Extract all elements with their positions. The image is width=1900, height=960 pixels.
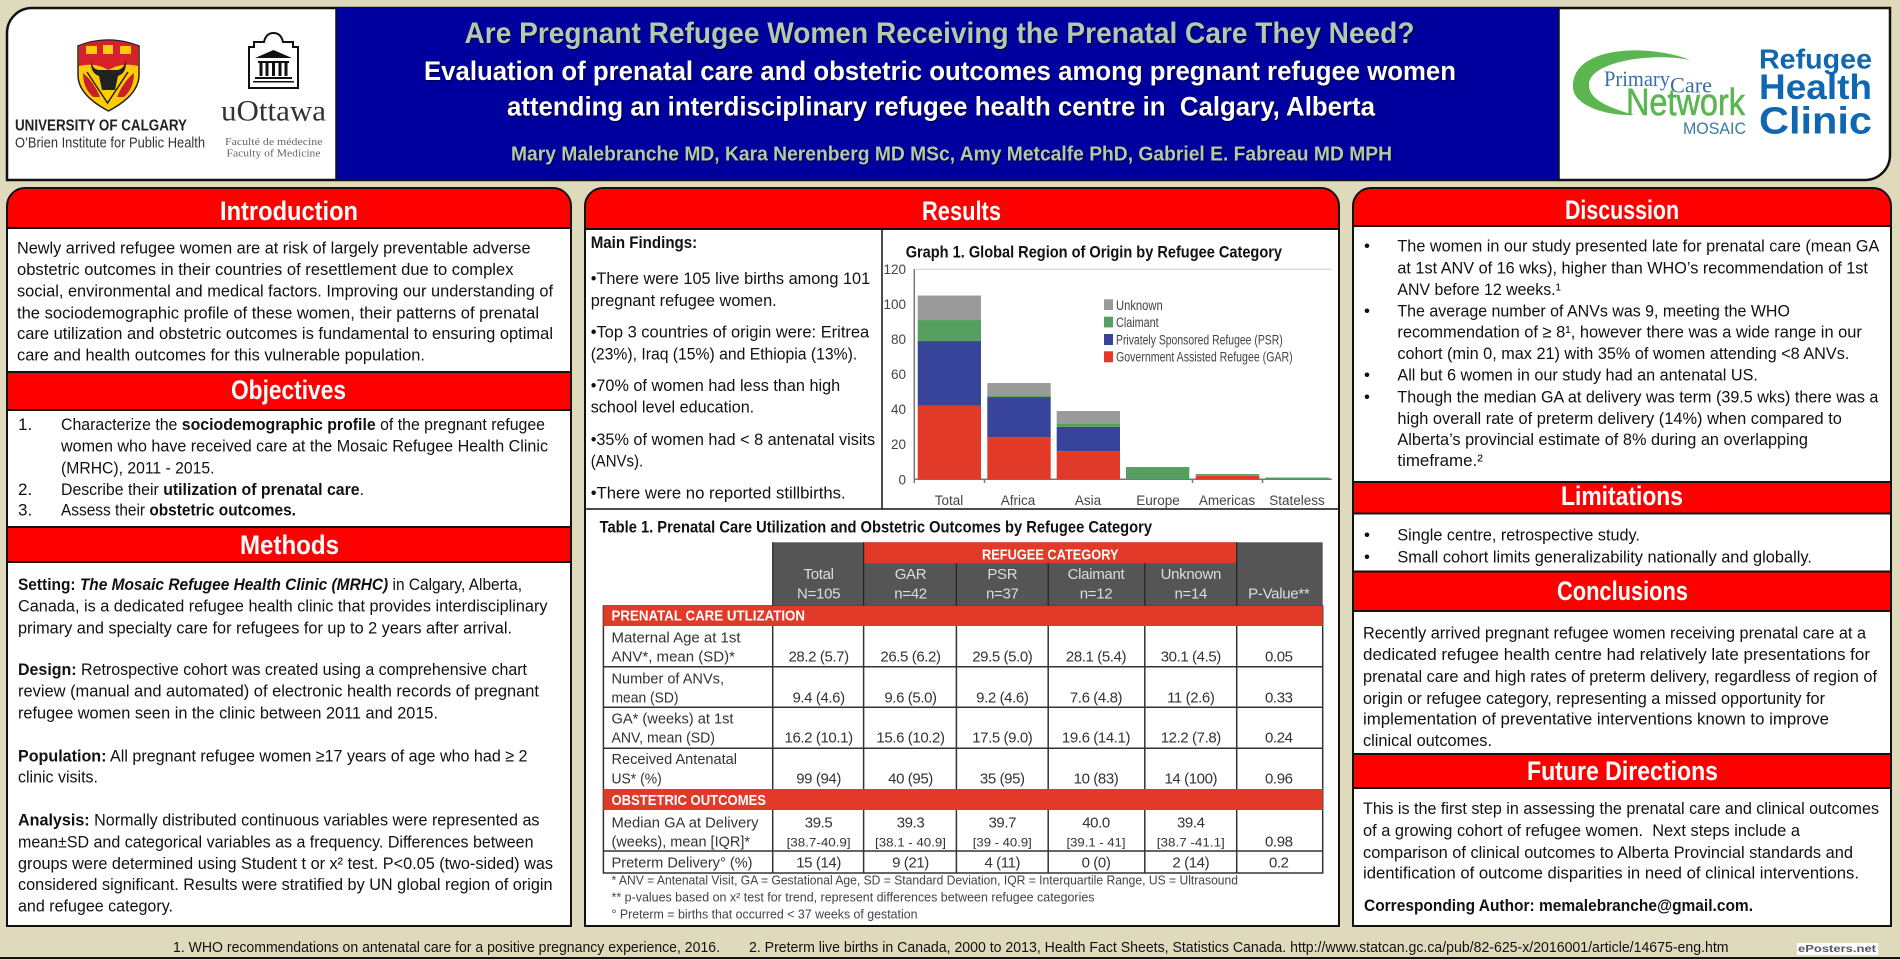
- text block: main findings: •Top 3 countries of origin were: Eritrea: [591, 323, 870, 342]
- table header: n=12: [1080, 585, 1112, 602]
- row: received antenatal US: US* (%): [612, 770, 662, 787]
- row: GA at first ANV: 17.5 (9.0): [972, 730, 1033, 747]
- row: GA at first ANV: 0.24: [1265, 730, 1293, 747]
- row: received antenatal US: 0.96: [1265, 770, 1293, 787]
- row: received antenatal US: 14 (100): [1164, 770, 1218, 787]
- header banner: [7, 8, 1890, 180]
- text block: main findings: (23%), Iraq (15%) and Ethiopia (13%).: [591, 344, 857, 363]
- text block: main findings: •There were 105 live births among 101: [591, 269, 870, 288]
- y axis labels: 60: [891, 367, 906, 382]
- panel: Future Directions: of a growing cohort of refugee women. Next steps include a: [1363, 821, 1801, 840]
- legend: [1104, 298, 1293, 365]
- logo: Primary Care Network Mosaic and Refugee Health Clinic: Health: [1759, 68, 1872, 107]
- panel: Future Directions: [1353, 754, 1891, 926]
- panel: Methods: primary and specialty care for refugees for up to 2 years after arrival.: [18, 618, 512, 637]
- section band: obstetric outcomes: OBSTETRIC OUTCOMES: [612, 792, 766, 809]
- panel: Methods: review (manual and automated) of electronic health records of pregnant: [18, 682, 539, 701]
- row: preterm delivery: 4 (11): [984, 854, 1021, 871]
- table header: n=37: [986, 585, 1019, 602]
- x axis labels: Africa: [1001, 493, 1036, 508]
- table: prenatal care utilization and obstetric outcomes: [600, 519, 1323, 921]
- panel: Discussion: cohort (min 0, max 21) with 35% of women attending <8 ANVs.: [1397, 344, 1849, 363]
- row: number of ANVs: 9.4 (4.6): [792, 690, 845, 707]
- row: preterm delivery: 2 (14): [1172, 854, 1210, 871]
- logo: University of Calgary: [15, 40, 205, 151]
- title block: Are Pregnant Refugee Women Receiving the Prenatal Care They Need?: [464, 17, 1414, 50]
- x axis labels: [935, 493, 1325, 508]
- row: received antenatal US: 35 (95): [980, 770, 1025, 787]
- row: GA at first ANV: 16.2 (10.1): [785, 730, 853, 747]
- row: maternal age: Maternal Age at 1st: [612, 629, 741, 646]
- text block: main findings: (ANVs).: [591, 452, 643, 471]
- table grid: [603, 606, 1323, 873]
- logo: Primary Care Network Mosaic and Refugee Health Clinic: Clinic: [1759, 100, 1872, 142]
- text block: main findings: •70% of women had less than high: [591, 376, 840, 395]
- panel: Methods: considered significant. Results were stratified by UN global region of origin: [18, 875, 552, 894]
- panel: Conclusions: Conclusions: [1557, 576, 1688, 606]
- row: median GA at delivery: [612, 814, 1293, 851]
- panel: Discussion: •: [1364, 366, 1370, 385]
- x axis labels: Europe: [1136, 493, 1180, 508]
- panel: Limitations: Limitations: [1561, 481, 1683, 511]
- panel: Objectives: 3.: [18, 501, 32, 520]
- logo: University of Calgary: UNIVERSITY OF CALGARY: [15, 118, 188, 135]
- logo: uOttawa: Faculté de médecine: [225, 136, 323, 148]
- row: preterm delivery: 0.2: [1269, 854, 1289, 871]
- row: GA at first ANV: 12.2 (7.8): [1161, 730, 1221, 747]
- table header: n=42: [894, 585, 927, 602]
- legend: Government Assisted Refugee (GAR): [1116, 350, 1293, 365]
- panel: right column: [1353, 188, 1891, 926]
- panel: Objectives: 2.: [18, 480, 32, 499]
- row: number of ANVs: 9.2 (4.6): [976, 690, 1029, 707]
- row: GA at first ANV: GA* (weeks) at 1st: [612, 710, 734, 727]
- row: received antenatal US: 40 (95): [888, 770, 933, 787]
- panel: Limitations: Single centre, retrospective study.: [1397, 526, 1640, 545]
- y axis labels: 0: [898, 472, 906, 487]
- table footnotes: [612, 872, 1238, 921]
- row: number of ANVs: [612, 670, 1293, 707]
- panel: Discussion: Alberta’s provincial estimate of 8% during an overlapping: [1397, 430, 1808, 449]
- panel: Introduction: care utilization and obstetric outcomes is fundamental to ensuring optimal: [17, 324, 553, 343]
- x axis labels: Americas: [1199, 493, 1255, 508]
- title block: Evaluation of prenatal care and obstetric outcomes among pregnant refugee women: [424, 56, 1456, 86]
- logo: University of Calgary: O’Brien Institute for Public Health: [15, 134, 205, 151]
- row: maternal age: 0.05: [1265, 649, 1293, 666]
- panel: Methods: mean±SD and categorical variables as a frequency. Differences between: [18, 832, 534, 851]
- row: number of ANVs: 11 (2.6): [1167, 690, 1215, 707]
- title block: [424, 17, 1456, 166]
- panel: Discussion: ANV before 12 weeks.¹: [1397, 280, 1561, 299]
- row: median GA at delivery: [38.1 - 40.9]: [875, 836, 946, 850]
- table header: Total: [804, 566, 834, 583]
- panel: Objectives: Describe their utilization of prenatal care.: [61, 480, 364, 499]
- row: number of ANVs: 0.33: [1265, 690, 1293, 707]
- panel: Future Directions: Corresponding Author: memalebranche@gmail.com.: [1364, 896, 1753, 915]
- panel: Introduction: social, environmental and medical factors. Improving our understanding of: [17, 282, 553, 301]
- panel: Discussion: Though the median GA at delivery was term (39.5 wks) there was a: [1397, 387, 1879, 406]
- row: GA at first ANV: ANV, mean (SD): [612, 730, 715, 747]
- row: median GA at delivery: Median GA at Delivery: [612, 814, 759, 831]
- row: number of ANVs: mean (SD): [612, 690, 678, 707]
- panel: Introduction: the sociodemographic profile of these women, their patterns of prenatal: [17, 303, 539, 322]
- panel: Conclusions: clinical outcomes.: [1363, 731, 1492, 750]
- panel: Conclusions: prenatal care and high rates of preterm delivery, regardless of region of: [1363, 667, 1877, 686]
- table header: N=105: [797, 585, 840, 602]
- row: GA at first ANV: 19.6 (14.1): [1062, 730, 1130, 747]
- panel: Methods: Analysis: Normally distributed continuous variables were represented as: [18, 811, 540, 830]
- panel: Introduction: Newly arrived refugee women are at risk of largely preventable adverse: [17, 238, 530, 258]
- text block: main findings: •35% of women had < 8 antenatal visits: [591, 430, 875, 449]
- row: median GA at delivery: 39.3: [897, 814, 924, 831]
- panel: Methods: refugee women seen in the clinic between 2011 and 2015.: [18, 703, 438, 722]
- panel: Methods: and refugee category.: [18, 897, 173, 916]
- y axis labels: 80: [891, 332, 906, 347]
- row: median GA at delivery: [38.7-40.9]: [787, 836, 851, 850]
- y axis labels: [883, 262, 906, 487]
- y axis labels: 40: [891, 402, 906, 417]
- text block: main findings: Main Findings:: [591, 233, 697, 252]
- text block: main findings: [591, 233, 875, 502]
- table footnotes: ° Preterm = births that occurred < 37 weeks of gestation: [612, 906, 918, 921]
- panel: Discussion: All but 6 women in our study had an antenatal US.: [1397, 366, 1758, 385]
- table footnotes: ** p-values based on x² test for trend, represent differences between refugee categories: [612, 890, 1095, 905]
- panel: Discussion: [1353, 188, 1891, 482]
- panel: Discussion: •: [1364, 302, 1370, 321]
- panel: Future Directions: Future Directions: [1527, 756, 1718, 786]
- panel: Methods: Setting: The Mosaic Refugee Health Clinic (MRHC) in Calgary, Alberta,: [18, 575, 522, 594]
- panel: left column: [7, 188, 571, 926]
- panel: Limitations: •: [1364, 526, 1370, 545]
- row: median GA at delivery: (weeks), mean [IQR]*: [612, 834, 750, 851]
- row: median GA at delivery: [39 - 40.9]: [973, 836, 1032, 850]
- panel: Discussion: The women in our study presented late for prenatal care (mean GA: [1397, 237, 1880, 256]
- panel: Conclusions: implementation of preventative interventions known to improve: [1363, 710, 1829, 728]
- panel: Objectives: 1.: [18, 415, 32, 434]
- panel: Methods: Design: Retrospective cohort was created using a comprehensive chart: [18, 660, 527, 679]
- panel: Limitations: [1353, 481, 1891, 572]
- table: prenatal care utilization and obstetric outcomes: Table 1. Prenatal Care Utilization and Obstetric Outcomes by Refugee Category: [600, 519, 1153, 537]
- table header: P-Value**: [1248, 585, 1310, 602]
- panel: Introduction: care and health outcomes for this vulnerable population.: [17, 346, 425, 365]
- table header: n=14: [1175, 585, 1207, 602]
- legend: Claimant: [1116, 315, 1159, 330]
- row: number of ANVs: 9.6 (5.0): [884, 690, 937, 707]
- panel: Limitations: •: [1364, 547, 1370, 566]
- panel: Discussion: timeframe.²: [1397, 451, 1483, 470]
- panel: Limitations: Small cohort limits generalizability nationally and globally.: [1397, 547, 1812, 566]
- panel: Discussion: •: [1364, 387, 1370, 406]
- panel: Methods: Methods: [240, 530, 339, 560]
- logo: Primary Care Network Mosaic and Refugee Health Clinic: Care: [1670, 73, 1712, 98]
- table footnotes: * ANV = Antenatal Visit, GA = Gestational Age, SD = Standard Deviation, IQR = Interquartile Range, US = Ultrasound: [612, 872, 1238, 887]
- row: number of ANVs: Number of ANVs,: [612, 670, 724, 687]
- panel: Conclusions: origin or refugee category, representing a missed opportunity for: [1363, 689, 1825, 708]
- row: GA at first ANV: [612, 710, 1293, 747]
- row: maternal age: ANV*, mean (SD)*: [612, 649, 735, 666]
- panel: Introduction: [7, 188, 571, 372]
- logo: Primary Care Network Mosaic and Refugee Health Clinic: MOSAIC: [1683, 119, 1746, 138]
- footer references: 2. Preterm live births in Canada, 2000 to 2013, Health Fact Sheets, Statistics Canada. http://www.statcan.gc.ca/pub/82-625-x/2016001/article/14675-eng.htm: [749, 940, 1728, 956]
- row: maternal age: 28.2 (5.7): [788, 649, 849, 666]
- row: preterm delivery: Preterm Delivery° (%): [612, 854, 752, 871]
- logo: uOttawa: Faculty of Medicine: [226, 148, 321, 160]
- panel: Future Directions: comparison of clinical outcomes to Alberta Provincial standards and: [1363, 843, 1853, 862]
- panel: Discussion: high overall rate of preterm delivery (14%) when compared to: [1397, 409, 1842, 428]
- logo: Primary Care Network Mosaic and Refugee Health Clinic: [1573, 43, 1872, 142]
- row: preterm delivery: 15 (14): [796, 854, 841, 871]
- x axis labels: Stateless: [1269, 493, 1325, 508]
- chart: global region of origin by refugee category: [883, 244, 1332, 508]
- row: received antenatal US: Received Antenatal: [612, 751, 737, 768]
- logo: uOttawa: uOttawa: [221, 95, 326, 128]
- panel: Methods: groups were determined using Student t or x² test. P<0.05 (two-sided) was: [18, 854, 553, 873]
- panel: Objectives: Assess their obstetric outcomes.: [61, 501, 296, 520]
- panel: Objectives: women who have received care at the Mosaic Refugee Health Clinic: [60, 437, 548, 456]
- y axis labels: 100: [883, 297, 906, 312]
- panel: Discussion: The average number of ANVs was 9, meeting the WHO: [1397, 302, 1790, 321]
- panel: Conclusions: Recently arrived pregnant refugee women receiving prenatal care at a: [1363, 624, 1867, 642]
- y axis labels: 120: [883, 262, 906, 277]
- y axis labels: 20: [891, 437, 906, 452]
- panel: Future Directions: This is the first step in assessing the prenatal care and clinical outcomes: [1363, 799, 1879, 818]
- panel: Conclusions: [1353, 572, 1891, 754]
- row: median GA at delivery: 0.98: [1265, 834, 1293, 851]
- row: maternal age: 26.5 (6.2): [880, 649, 941, 666]
- row: maternal age: 29.5 (5.0): [972, 649, 1033, 666]
- panel: Conclusions: dedicated refugee health centre had relatively late presentations for: [1363, 645, 1870, 664]
- table header: GAR: [895, 566, 927, 583]
- panel: Objectives: Characterize the sociodemographic profile of the pregnant refugee: [61, 415, 545, 434]
- panel: Discussion: •: [1364, 237, 1370, 256]
- table header: [773, 542, 1323, 606]
- text block: main findings: •There were no reported stillbirths.: [591, 483, 846, 502]
- table header: Unknown: [1161, 566, 1221, 583]
- panel: Discussion: at 1st ANV of 16 wks), higher than WHO’s recommendation of 1st: [1397, 258, 1868, 277]
- legend: Unknown: [1116, 298, 1163, 313]
- logo: Primary Care Network Mosaic and Refugee Health Clinic: Primary: [1604, 66, 1670, 91]
- panel: Methods: Population: All pregnant refugee women ≥17 years of age who had ≥ 2: [18, 747, 528, 766]
- row: median GA at delivery: 39.5: [805, 814, 832, 831]
- panel: Results: Results: [922, 196, 1001, 226]
- section band: obstetric outcomes: [603, 789, 1323, 810]
- watermark: ePosters logo: [1797, 943, 1878, 955]
- legend: Privately Sponsored Refugee (PSR): [1116, 332, 1283, 347]
- footer references: [0, 940, 1900, 958]
- logo: Primary Care Network Mosaic and Refugee Health Clinic: Network: [1626, 82, 1746, 124]
- row: median GA at delivery: [39.1 - 41]: [1066, 836, 1126, 850]
- panel: Objectives: (MRHC), 2011 - 2015.: [61, 458, 214, 477]
- panel: Introduction: obstetric outcomes in their countries of resettlement due to complex: [17, 260, 514, 279]
- chart: global region of origin by refugee category: Graph 1. Global Region of Origin by Refugee Category: [906, 244, 1283, 262]
- row: preterm delivery: 0 (0): [1082, 854, 1111, 871]
- row: received antenatal US: [612, 751, 1293, 787]
- text block: main findings: pregnant refugee women.: [591, 291, 777, 310]
- panel: Discussion: Discussion: [1565, 195, 1679, 225]
- panel: Methods: Canada, is a dedicated refugee health clinic that provides interdisciplinary: [18, 597, 548, 616]
- row: GA at first ANV: 15.6 (10.2): [876, 730, 945, 747]
- table header: Claimant: [1068, 566, 1126, 583]
- row: received antenatal US: 99 (94): [796, 770, 841, 787]
- logo: Primary Care Network Mosaic and Refugee Health Clinic: Refugee: [1759, 43, 1872, 74]
- panel: Methods: clinic visits.: [18, 767, 98, 786]
- row: median GA at delivery: 39.4: [1177, 814, 1205, 831]
- table header: PSR: [987, 566, 1018, 583]
- row: received antenatal US: 10 (83): [1074, 770, 1119, 787]
- section band: prenatal care utilization: [603, 606, 1323, 626]
- panel: Objectives: Objectives: [231, 375, 346, 405]
- text block: main findings: school level education.: [591, 398, 754, 417]
- x axis labels: Total: [935, 493, 963, 508]
- panel: Future Directions: identification of outcome disparities in need of clinical interventions.: [1363, 864, 1859, 882]
- logo: uOttawa: [221, 33, 326, 160]
- row: maternal age: [612, 629, 1293, 666]
- row: preterm delivery: 9 (21): [892, 854, 929, 871]
- row: maternal age: 30.1 (4.5): [1161, 649, 1221, 666]
- row: maternal age: 28.1 (5.4): [1066, 649, 1126, 666]
- panel: Discussion: recommendation of ≥ 8¹, however there was a wide range in our: [1397, 322, 1862, 341]
- title block: attending an interdisciplinary refugee health centre in Calgary, Alberta: [507, 92, 1376, 122]
- panel: Objectives: [7, 372, 571, 527]
- x axis labels: Asia: [1075, 493, 1102, 508]
- table header: REFUGEE CATEGORY: [982, 546, 1118, 563]
- row: median GA at delivery: 40.0: [1082, 814, 1110, 831]
- panel: Introduction: Introduction: [220, 196, 358, 226]
- row: preterm delivery: [612, 854, 1289, 871]
- panel: Methods: [7, 527, 571, 926]
- section band: prenatal care utilization: PRENATAL CARE UTLIZATION: [612, 608, 805, 625]
- row: median GA at delivery: [38.7 -41.1]: [1157, 836, 1225, 850]
- row: number of ANVs: 7.6 (4.8): [1070, 690, 1123, 707]
- watermark: ePosters logo: ePosters.net: [1798, 944, 1877, 955]
- title block: Mary Malebranche MD, Kara Nerenberg MD MSc, Amy Metcalfe PhD, Gabriel E. Fabreau MD MPH: [511, 144, 1392, 166]
- row: median GA at delivery: 39.7: [988, 814, 1016, 831]
- bars: [918, 296, 1329, 479]
- panel: Results: [585, 188, 1339, 926]
- footer references: 1. WHO recommendations on antenatal care for a positive pregnancy experience, 2016.: [173, 940, 720, 956]
